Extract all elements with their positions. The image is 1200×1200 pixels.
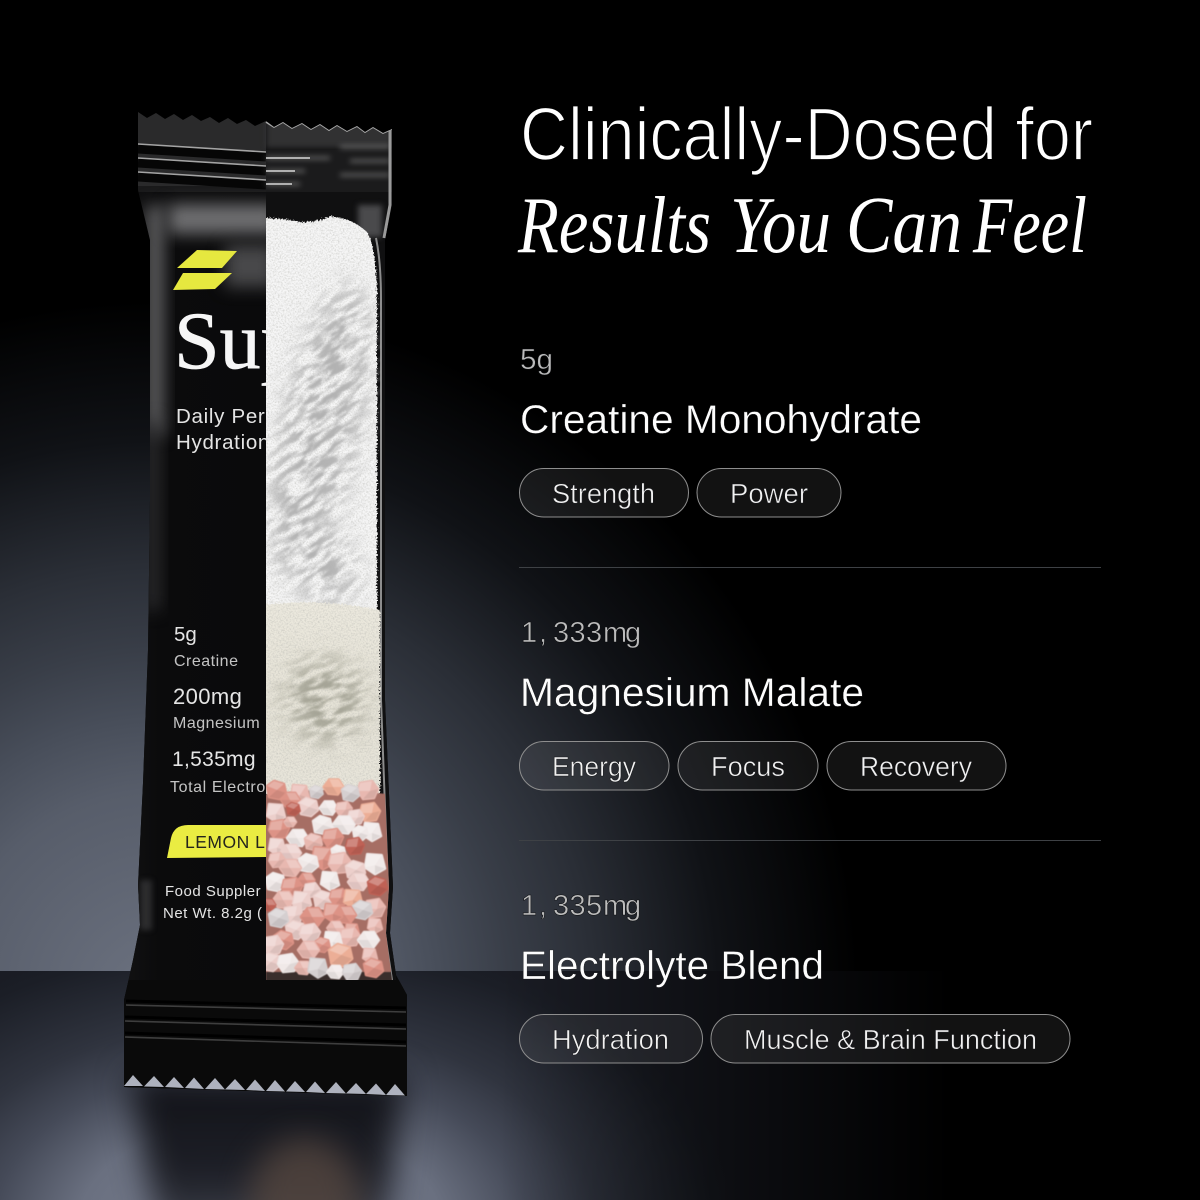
top seal crimp lines (138, 149, 266, 185)
white creatine powder (266, 215, 392, 980)
dose: 1,335mg (521, 890, 641, 922)
reflection of stick pack on floor (128, 1075, 404, 1200)
benefit pills (520, 468, 841, 517)
benefit pills: Focus (711, 751, 785, 782)
flavour badge (167, 825, 270, 858)
dose: 1,333mg (521, 617, 641, 649)
dose list on pack: 1,535mg (172, 748, 256, 771)
dose: 5g (520, 344, 553, 376)
dose list on pack: Creatine (174, 653, 238, 670)
stick pack (124, 112, 407, 1096)
pack silhouette (128, 552, 406, 1096)
benefit pills: Hydration (552, 1024, 669, 1055)
benefit pills: Power (730, 478, 808, 509)
tagline (178, 408, 266, 453)
title: Can (846, 180, 962, 270)
transparent window (266, 110, 396, 990)
benefit pills: Recovery (860, 751, 972, 782)
dose list on pack (170, 623, 266, 796)
dose list on pack: 200mg (173, 684, 242, 709)
legal text: Food Suppler (165, 883, 261, 900)
title: You (730, 180, 831, 270)
section: electrolytes (520, 890, 1070, 1063)
window edge highlights (384, 130, 390, 238)
section: magnesium (520, 617, 1006, 790)
tagline: Hydration (176, 431, 270, 454)
dose list on pack: Magnesium (173, 715, 260, 732)
bottom seal serrated teeth (124, 1075, 405, 1096)
tagline: Daily Per (176, 405, 265, 428)
title: Feel (972, 180, 1087, 270)
benefit pills: Energy (552, 751, 636, 782)
dose list on pack: 5g (174, 623, 197, 646)
brand name: Sup (174, 295, 302, 386)
benefit pills: Muscle & Brain Function (744, 1024, 1037, 1055)
ingredient name: Electrolyte Blend (520, 944, 824, 988)
dose list on pack: Total Electro (170, 779, 266, 796)
benefit pills: Strength (552, 478, 655, 509)
blurred seal lines (266, 147, 390, 184)
opaque left half with foil highlights (130, 112, 396, 980)
title: Clinically-Dosed for (520, 92, 1093, 176)
lower seal (120, 980, 410, 1100)
title (517, 92, 1093, 270)
window teeth highlight (266, 122, 392, 133)
ingredient name: Creatine Monohydrate (520, 398, 922, 442)
ingredient name: Magnesium Malate (520, 671, 864, 715)
cream magnesium powder (262, 602, 380, 795)
legal text (163, 883, 263, 922)
legal text: Net Wt. 8.2g ( (163, 905, 263, 922)
section: creatine (520, 344, 922, 517)
brand mark (173, 250, 237, 290)
flavour badge: LEMON L (185, 832, 265, 852)
title: Results (517, 180, 711, 270)
benefit pills (520, 742, 1006, 790)
pink salt crystals (261, 779, 394, 982)
benefit pills (520, 1014, 1070, 1063)
